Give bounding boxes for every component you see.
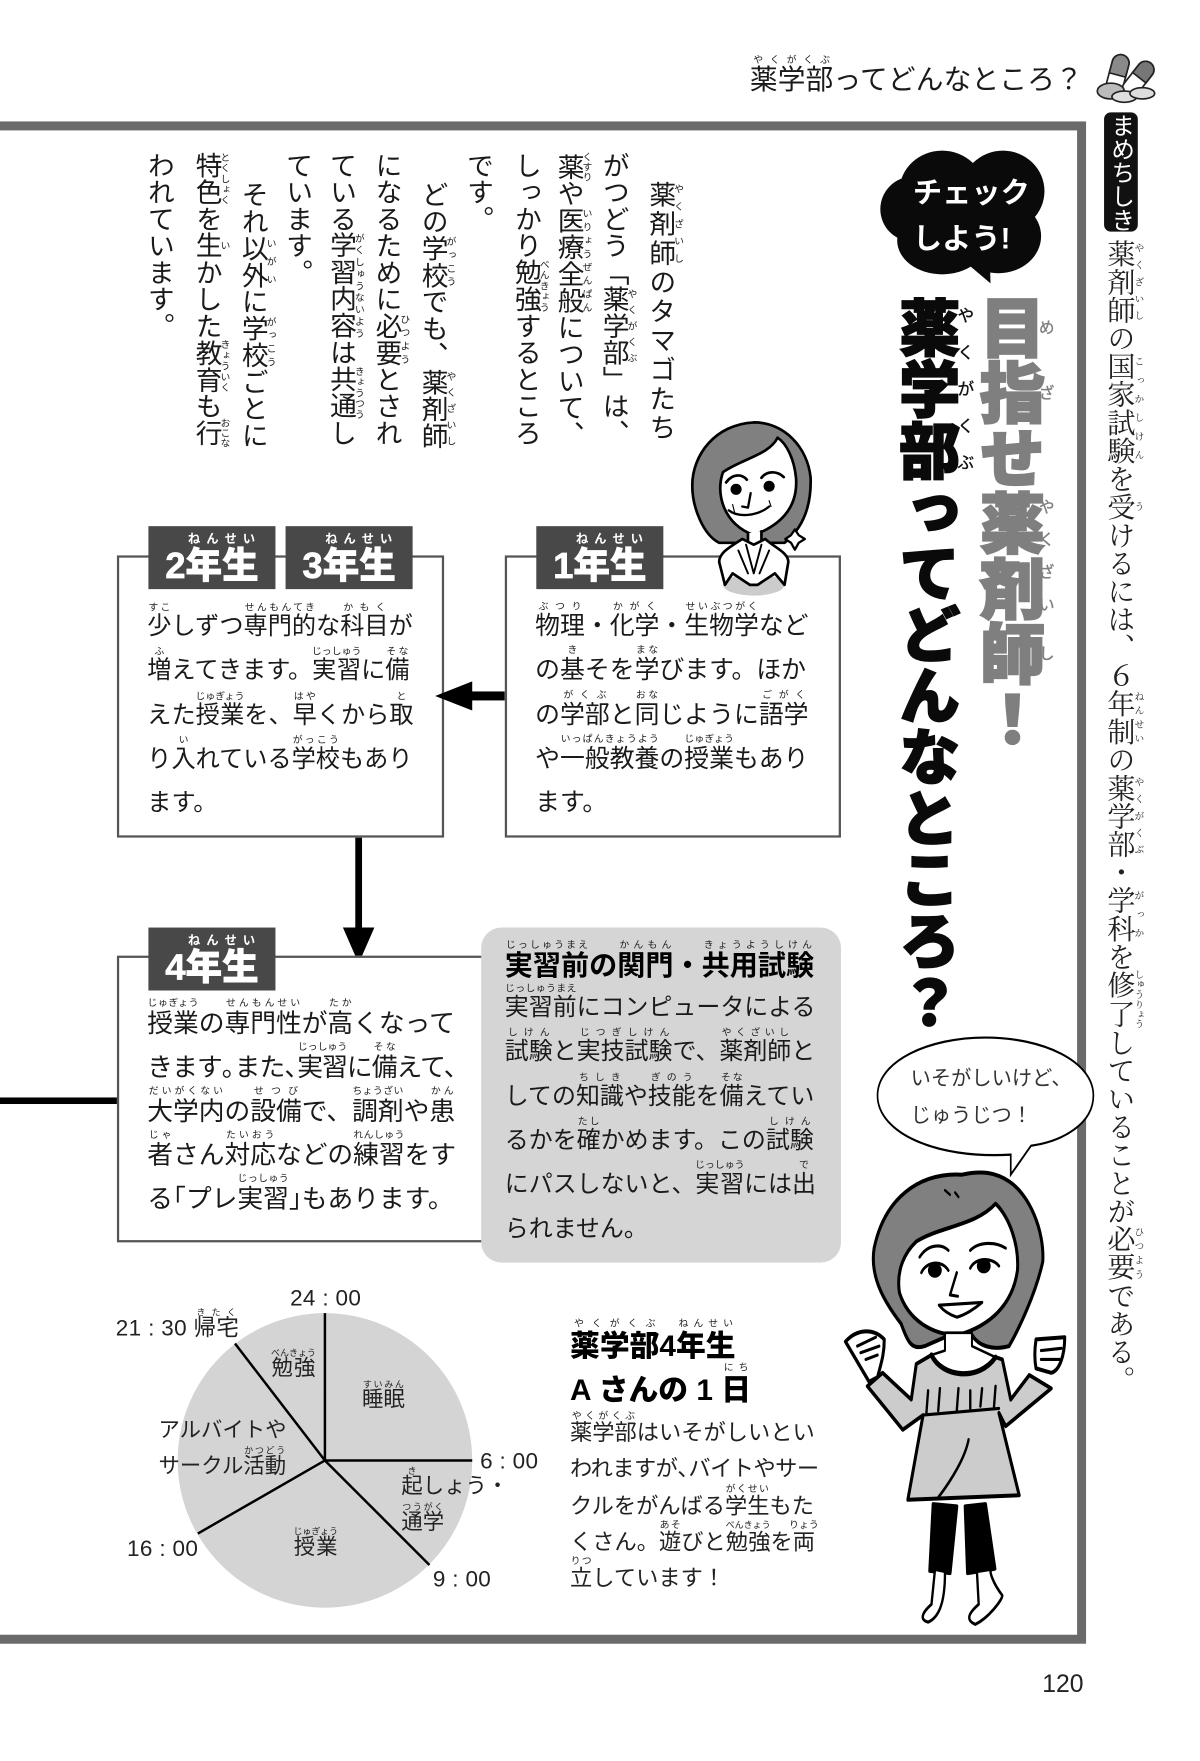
intro vertical text: しっかり 勉強べんきょう するところ [510, 152, 550, 446]
student's day text [570, 1318, 819, 1591]
year 2 tag: 2年生ねんせい [165, 533, 259, 586]
year 4 text: 授業じゅぎょう の専門性せんもんせい が高たか くなって [147, 997, 455, 1038]
year 1 text: や一般教養いっぱんきょうよう の授業じゅぎょう もあり [535, 733, 808, 772]
year 1 text: の基き そを学まな びます。ほか [535, 644, 806, 684]
day schedule pie chart: 24 : 00 [290, 1286, 361, 1311]
callout cloud: check it: しよう! [913, 223, 1010, 255]
text: 120 [1042, 1670, 1084, 1698]
day schedule pie chart: 授業じゅぎょう [293, 1527, 338, 1559]
callout cloud: check it: チェック [913, 177, 1030, 209]
years 2 and 3 text: えた授業じゅぎょう を、早はや くから取と [147, 690, 414, 729]
year 1 text: ます。 [535, 788, 607, 816]
year 1 tag [536, 526, 663, 589]
year 4 text: きます。また、実習じっしゅう に備そな えて、 [147, 1041, 469, 1082]
title: mezase yakuzaishi: 目め 指ざ せ 薬やく 剤ざい 師し ！ [970, 295, 1056, 751]
year 1 text: の学部がくぶ と同おな じように語学ごがく [535, 689, 809, 729]
callout cloud: check it [880, 150, 1044, 284]
year 4 text: 大学内だいがくない の設備せつび で、調剤ちょうざい や患かん [147, 1085, 455, 1125]
large woman illustration [844, 1170, 1066, 1626]
body: クルをがんばる学生がくせい もた [570, 1483, 814, 1519]
year 1 tag: 1年生ねんせい [553, 533, 647, 586]
year 4 text: 者じゃ さん対応たいおう などの練習れんしゅう をす [147, 1129, 456, 1169]
intro vertical text [143, 152, 684, 449]
day schedule pie chart: 勉強べんきょう [271, 1348, 316, 1381]
body: われますが、バイトやサー [570, 1457, 819, 1482]
day schedule pie chart: 起き しょう・ [401, 1466, 508, 1499]
year 4 text [147, 997, 469, 1213]
years 2 and 3 text: 増ふ えてきます。実習じっしゅう に備そな [147, 645, 409, 684]
intro vertical text: 薬剤師やくざいし のタマゴたち [644, 181, 684, 443]
speech bubble: じゅうじつ！ [911, 1104, 1032, 1127]
speech bubble [876, 1036, 1094, 1178]
student's day text: A さんの 1 日にち [570, 1362, 751, 1406]
intro vertical text: 薬くすり や 医療全般いりょうぜんぱん について、 [553, 152, 593, 448]
day schedule pie chart: サークル活動かつどう [159, 1446, 286, 1478]
body: 立りつ しています！ [570, 1555, 725, 1591]
intro vertical text: ている 学習内容がくしゅうないよう は 共通きょうつう し [325, 152, 365, 446]
years 2 and 3 text: 少すこ しずつ専門的せんもんてき な科目かもく が [147, 602, 413, 640]
connector to left page [0, 1097, 117, 1104]
box outline [117, 956, 500, 1242]
exam text: にパスしないと、実習じっしゅう には出で [505, 1159, 816, 1197]
intro vertical text: になるために 必要ひつよう とされ [370, 152, 410, 446]
day schedule pie chart [116, 1286, 538, 1608]
day schedule pie chart: アルバイトや [159, 1419, 286, 1442]
body: くさん。遊あそ びと勉強べんきょう を両りょう [570, 1519, 819, 1555]
heading: 薬学部やくがくぶ 4年生ねんせい [570, 1318, 736, 1363]
exam text: られません。 [505, 1215, 648, 1242]
intro vertical text: 特色とくしょく を 生い かした 教育きょういく も 行おこな [191, 152, 230, 448]
exam text: るかを確たし かめます。この試験しけん [505, 1115, 814, 1154]
sidebar text: 薬剤師やくざいし の 国家試験こっかしけん を 受う けるには、 ６ 年制ねんせい の 薬学部やくがくぶ ・ 学科がっか を 修了しゅうりょう していることが 必要ひつよう である。 [1104, 239, 1145, 1393]
year 1 text [535, 600, 809, 816]
year 4 text: る「プレ実習じっしゅう 」もあります。 [147, 1173, 454, 1213]
speech bubble: いそがしいけど、 [911, 1067, 1072, 1089]
panel: year 1 [504, 526, 841, 838]
body [570, 1410, 819, 1591]
panel: pre-practical exam [481, 928, 841, 1263]
sidebar tag: mamechishiki: まめちしき [1109, 113, 1134, 231]
year 3 tag [286, 526, 413, 589]
day schedule pie chart: 6 : 00 [480, 1449, 538, 1474]
outer page frame [0, 121, 1086, 1644]
intro vertical text: がつどう「 薬学部やくがくぶ 」は、 [598, 152, 637, 446]
years 2 and 3 text: り入い れている学校がっこう もあり [147, 734, 413, 772]
day schedule pie chart: 通学つうがく [401, 1502, 444, 1535]
exam heading: 実習前じっしゅうまえ の関門かんもん ・共用試験きょうようしけん [505, 939, 814, 982]
body: 薬学部やくがくぶ はいそがしいとい [570, 1410, 815, 1446]
box outline [505, 555, 841, 838]
years 2 and 3 text [147, 602, 414, 816]
pie graphic [178, 1313, 472, 1608]
page header title: 薬学部やくがくぶ ってどんなところ？ [750, 54, 1083, 96]
day schedule pie chart: 21 : 30 帰宅きたく [116, 1308, 239, 1341]
day schedule pie chart: 9 : 00 [433, 1567, 491, 1592]
exam text: しての知識ちしき や技能ぎのう を備そな えてい [505, 1071, 814, 1110]
arrow: years 2-3 to year 4 [343, 838, 374, 956]
year 4 tag: 4年生ねんせい [165, 934, 259, 987]
intro vertical text: それ 以外いがい に 学校がっこう ごとに [237, 181, 277, 449]
exam text [505, 983, 816, 1242]
small woman illustration [690, 421, 812, 596]
intro vertical text: どの 学校がっこう でも、 薬剤師やくざいし [417, 181, 456, 449]
panel: year 4 [116, 928, 482, 1242]
box outline [117, 555, 444, 838]
panel: years 2 and 3 [116, 526, 444, 838]
intro vertical text: ています。 [281, 152, 311, 286]
title: what is a pharmacy school: 薬学部やくがくぶ ってどんなところ？ [890, 297, 974, 1032]
icon: medicine pills [1096, 54, 1156, 104]
years 2 and 3 text: ます。 [147, 789, 217, 816]
exam text: 実習前じっしゅうまえ にコンピュータによる [505, 983, 815, 1021]
bubble outline [876, 1036, 1094, 1178]
year 4 tag [148, 928, 275, 991]
year 3 tag: 3年生ねんせい [302, 533, 396, 586]
intro vertical text: われています。 [143, 152, 173, 339]
year 2 tag [148, 526, 275, 589]
exam text: 試験しけん と実技試験じつぎしけん で、薬剤師やくざいし と [505, 1026, 815, 1065]
day schedule pie chart: 16 : 00 [127, 1537, 198, 1562]
arrow: year 1 to years 2-3 [435, 681, 505, 710]
day schedule pie chart: 睡眠すいみん [362, 1380, 405, 1412]
year 1 text: 物理ぶつり ・化学かがく ・生物学せいぶつがく など [535, 600, 809, 640]
intro vertical text: です。 [462, 152, 492, 232]
